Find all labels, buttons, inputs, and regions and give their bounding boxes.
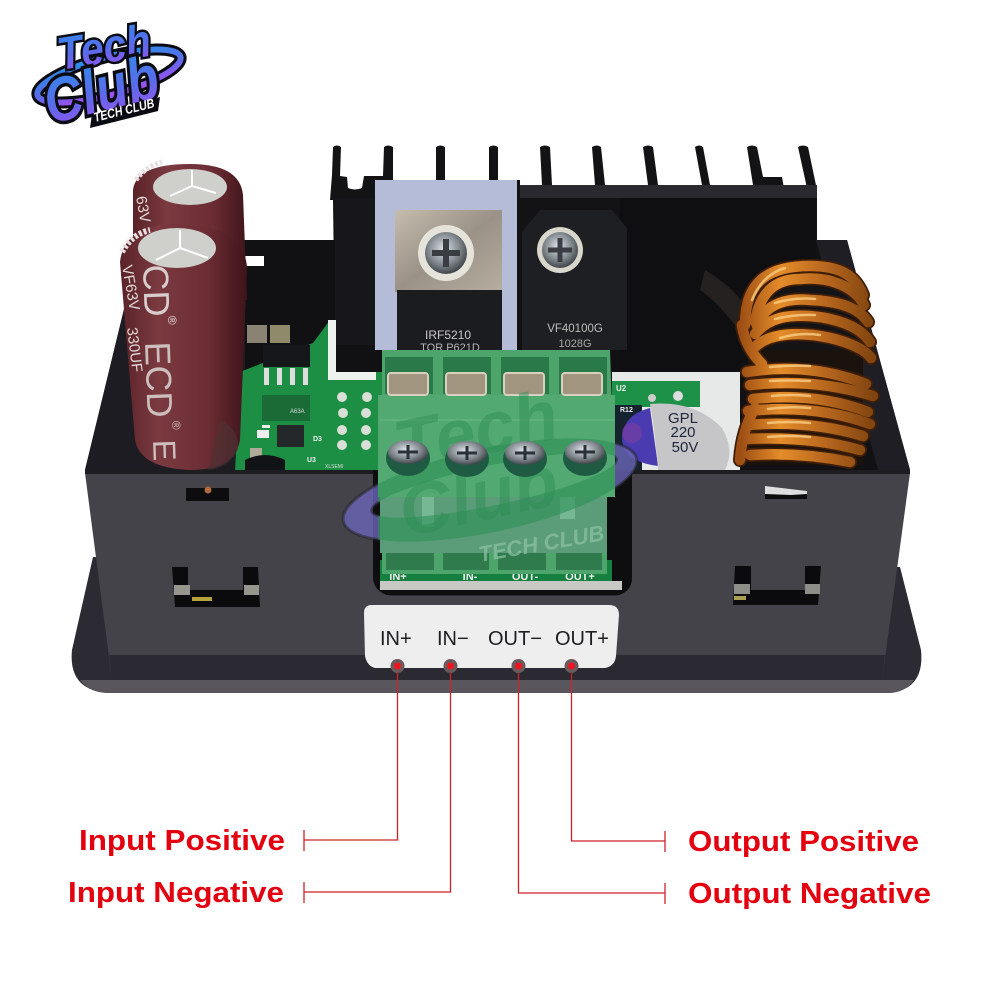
circuit board left xyxy=(235,320,382,472)
copper coil xyxy=(740,266,873,465)
label plate: IN− xyxy=(437,628,469,650)
right board area: R12 xyxy=(620,407,633,414)
watermark ellipse on wall xyxy=(335,418,645,562)
watermark ellipse on block xyxy=(378,438,615,542)
green terminal block xyxy=(378,350,615,574)
logo: Tech Club: Tech xyxy=(53,14,154,80)
right clip slot xyxy=(733,566,821,605)
back capacitor xyxy=(132,162,247,300)
label plate: OUT− xyxy=(488,628,542,650)
right board area: U2 xyxy=(616,384,627,393)
transistor IRF5210 xyxy=(395,210,502,354)
case interior back wall xyxy=(85,240,910,470)
device xyxy=(72,146,921,693)
front capacitor: ® xyxy=(165,316,179,325)
top notches on front wall xyxy=(186,486,807,501)
right board area xyxy=(612,372,740,472)
transistor IRF5210: IRF5210 xyxy=(425,328,471,342)
transistor VF40100G: 1028G xyxy=(558,338,592,350)
device: OUT- xyxy=(512,571,538,583)
wiring callouts xyxy=(68,659,931,910)
label plate: IN+ xyxy=(380,628,412,650)
green terminal block: TECH CLUB xyxy=(477,520,606,567)
label: Output Positive: Output Positive xyxy=(688,826,919,858)
device: IN+ xyxy=(389,571,407,583)
electrolytic capacitor GPL 220 50V: 50V xyxy=(672,439,698,456)
circuit board left: D3 xyxy=(313,436,322,443)
front capacitor: CD xyxy=(135,264,178,317)
circuit board left: A63A xyxy=(290,409,305,415)
logo: Tech Club: Club xyxy=(37,43,166,138)
transistor IRF5210: TOR P621D xyxy=(420,342,480,354)
electrolytic capacitor GPL 220 50V xyxy=(622,404,729,470)
front wall xyxy=(85,473,910,680)
circuit board under terminal xyxy=(380,560,612,583)
left clip slot xyxy=(172,567,260,607)
case left wall xyxy=(85,240,245,470)
transistor VF40100G xyxy=(522,210,627,350)
heat sink xyxy=(330,146,817,350)
front capacitor: ® xyxy=(169,421,183,430)
device: OUT+ xyxy=(565,571,595,583)
watermark letters: Tech xyxy=(387,375,565,488)
label: Output Negative: Output Negative xyxy=(688,878,931,910)
label plate: OUT+ xyxy=(555,628,609,650)
label plate xyxy=(364,605,619,668)
watermark letters: Club xyxy=(392,441,565,553)
front capacitor xyxy=(118,224,247,470)
logo: Tech Club: TECH CLUB xyxy=(92,95,156,125)
circuit board left: XLSEMI xyxy=(325,464,343,470)
bezel flange xyxy=(72,557,921,693)
circuit board left: U3 xyxy=(307,457,316,464)
electrolytic capacitor GPL 220 50V: GPL xyxy=(668,410,698,427)
watermark letters xyxy=(387,375,565,553)
front capacitor: ECD xyxy=(137,341,181,418)
front capacitor: E xyxy=(146,439,183,462)
label: Input Negative: Input Negative xyxy=(68,877,284,909)
case right wall xyxy=(816,240,910,470)
device: IN- xyxy=(463,571,478,583)
label: Input Positive: Input Positive xyxy=(79,825,285,857)
electrolytic capacitor GPL 220 50V: 220 xyxy=(670,424,696,441)
white cutout in back wall xyxy=(245,256,264,266)
front capacitor: 330UF xyxy=(123,326,145,373)
transistor VF40100G: VF40100G xyxy=(547,323,603,335)
front capacitor: VF63V xyxy=(118,264,143,312)
thermal pad xyxy=(375,180,517,350)
back capacitor: 63V xyxy=(132,195,153,224)
